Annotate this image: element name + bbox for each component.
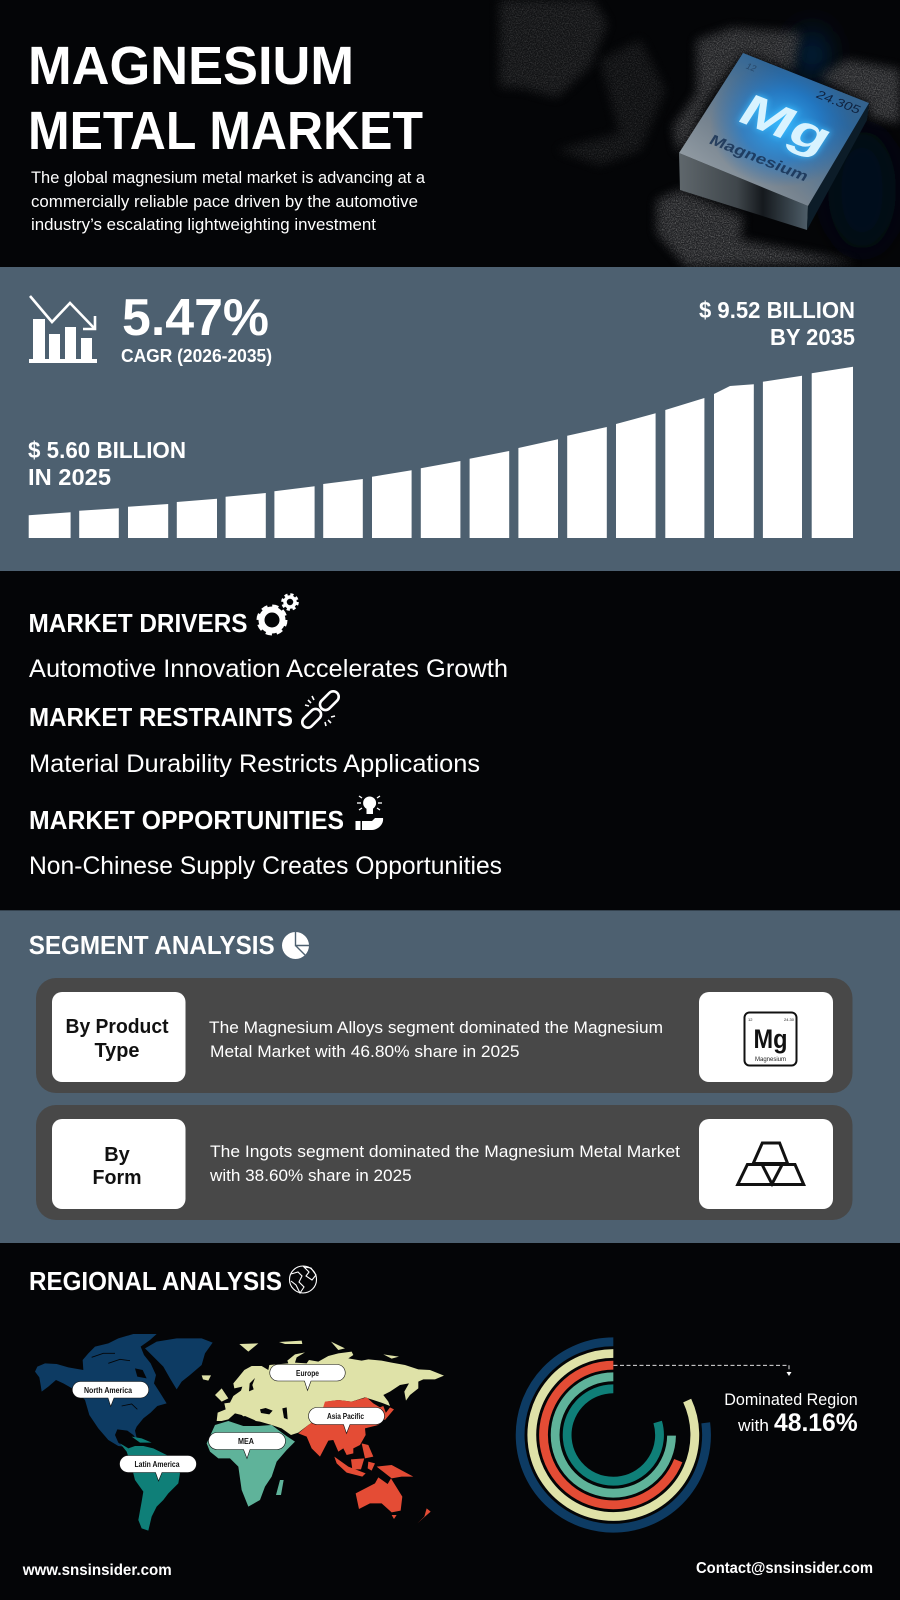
subtitle: commercially reliable pace driven by the automotive xyxy=(31,192,418,211)
map: Middle East and Africa xyxy=(207,1421,295,1507)
icon: Mg element tile: 24.30 xyxy=(784,1017,795,1022)
cube top face xyxy=(679,53,869,206)
text: product type: Metal Market with 46.80% share in 2025 xyxy=(210,1042,520,1061)
2025 value xyxy=(28,437,186,490)
footer: website: www.snsinsider.com xyxy=(22,1562,172,1579)
2025 value: $ 5.60 BILLION xyxy=(28,437,186,463)
bar chart: growth xyxy=(29,367,853,538)
heading: market drivers: MARKET DRIVERS xyxy=(28,608,248,638)
text: dominated region: 48.16% xyxy=(774,1409,858,1437)
2035 value: BY 2035 xyxy=(770,324,855,350)
panel: market size xyxy=(0,267,900,571)
label: by product type: Type xyxy=(94,1040,140,1062)
text: form: with 38.60% share in 2025 xyxy=(209,1166,412,1185)
label: by form xyxy=(92,1144,142,1189)
cube right side xyxy=(807,103,869,230)
text: form: The Ingots segment dominated the Magnesium Metal Market xyxy=(210,1142,680,1161)
text: product type: The Magnesium Alloys segment dominated the Magnesium xyxy=(209,1018,663,1037)
callout: Asia Pacific: Asia Pacific xyxy=(327,1412,364,1421)
map: Europe and North Asia xyxy=(202,1341,444,1435)
cube labels: Mg xyxy=(730,85,843,162)
map: Asia Pacific xyxy=(298,1397,431,1523)
text: dominated region xyxy=(724,1391,858,1437)
icon: ingots xyxy=(738,1143,804,1184)
callout: Europe xyxy=(270,1364,345,1390)
callout: Europe: Europe xyxy=(296,1369,319,1378)
hero image: magnesium cube on dark rock: 24.305 xyxy=(813,88,864,117)
panel: segment analysis xyxy=(0,910,900,1243)
2035 value xyxy=(699,297,855,350)
card: by form xyxy=(36,1105,852,1220)
label: by product type: By Product xyxy=(66,1016,169,1038)
icon: Mg element tile: Mg xyxy=(754,1024,788,1054)
hero image: magnesium cube on dark rock: Magnesium xyxy=(706,132,812,185)
heading: regional analysis: REGIONAL ANALYSIS xyxy=(29,1266,282,1296)
label: by form: Form xyxy=(92,1167,142,1189)
world map xyxy=(35,1334,444,1531)
text: restraint: Material Durability Restricts Applications xyxy=(29,750,480,778)
callout: North America xyxy=(72,1382,149,1406)
callout: North America: North America xyxy=(84,1386,132,1395)
cube left side xyxy=(679,153,808,230)
2025 value: IN 2025 xyxy=(28,464,111,490)
icon: Mg element tile: 12 xyxy=(748,1017,753,1022)
icon: bulb in hand xyxy=(356,796,383,830)
title xyxy=(28,36,423,161)
map: North America xyxy=(35,1334,213,1447)
title: MAGNESIUM xyxy=(28,36,354,96)
callout: Latin America: Latin America xyxy=(134,1460,180,1469)
text: dominated region: Dominated Region xyxy=(724,1391,858,1409)
icon: chart with falling arrow xyxy=(29,296,97,363)
map: Latin America xyxy=(120,1437,180,1531)
label: by form: By xyxy=(104,1144,131,1166)
text: form xyxy=(209,1142,680,1185)
hero image: magnesium cube on dark rock xyxy=(500,0,900,267)
CAGR value: 5.47% xyxy=(122,289,269,347)
blue backlight xyxy=(798,29,896,250)
icon: pie xyxy=(282,932,309,959)
icon: Mg element tile xyxy=(744,1012,796,1066)
subtitle: The global magnesium metal market is advancing at a xyxy=(31,168,426,187)
card: by product type xyxy=(36,978,852,1093)
2035 value: $ 9.52 BILLION xyxy=(699,297,855,323)
icon: gears xyxy=(258,594,298,634)
icon: Mg element tile: Magnesium xyxy=(755,1057,786,1063)
icon: broken chain xyxy=(300,689,341,730)
radial chart: regional share xyxy=(520,1342,707,1528)
title: METAL MARKET xyxy=(28,101,423,161)
subtitle: industry’s escalating lightweighting investment xyxy=(31,215,376,234)
text: product type xyxy=(209,1018,663,1061)
subtitle xyxy=(31,168,426,234)
footer: contact: Contact@snsinsider.com xyxy=(696,1560,873,1577)
text: dominated region: with xyxy=(737,1417,769,1435)
heading: market opportunities: MARKET OPPORTUNITIES xyxy=(29,805,344,835)
callout: MEA: MEA xyxy=(238,1437,254,1446)
heading: market restraints: MARKET RESTRAINTS xyxy=(29,702,293,732)
heading: segment analysis: SEGMENT ANALYSIS xyxy=(29,930,275,960)
hero image: magnesium cube on dark rock: 12 xyxy=(744,61,759,73)
label: by product type xyxy=(66,1016,169,1062)
CAGR value: CAGR (2026-2035) xyxy=(121,346,272,366)
callout: Asia Pacific xyxy=(308,1408,384,1434)
callout: Latin America xyxy=(120,1456,196,1481)
callout: MEA xyxy=(208,1432,286,1458)
text: opportunity: Non-Chinese Supply Creates Opportunities xyxy=(29,852,502,880)
icon: globe xyxy=(290,1266,316,1293)
text: driver: Automotive Innovation Accelerates Growth xyxy=(29,655,508,683)
arrow: dashed leader xyxy=(614,1365,792,1376)
hero image: magnesium cube on dark rock: Mg xyxy=(730,85,843,162)
